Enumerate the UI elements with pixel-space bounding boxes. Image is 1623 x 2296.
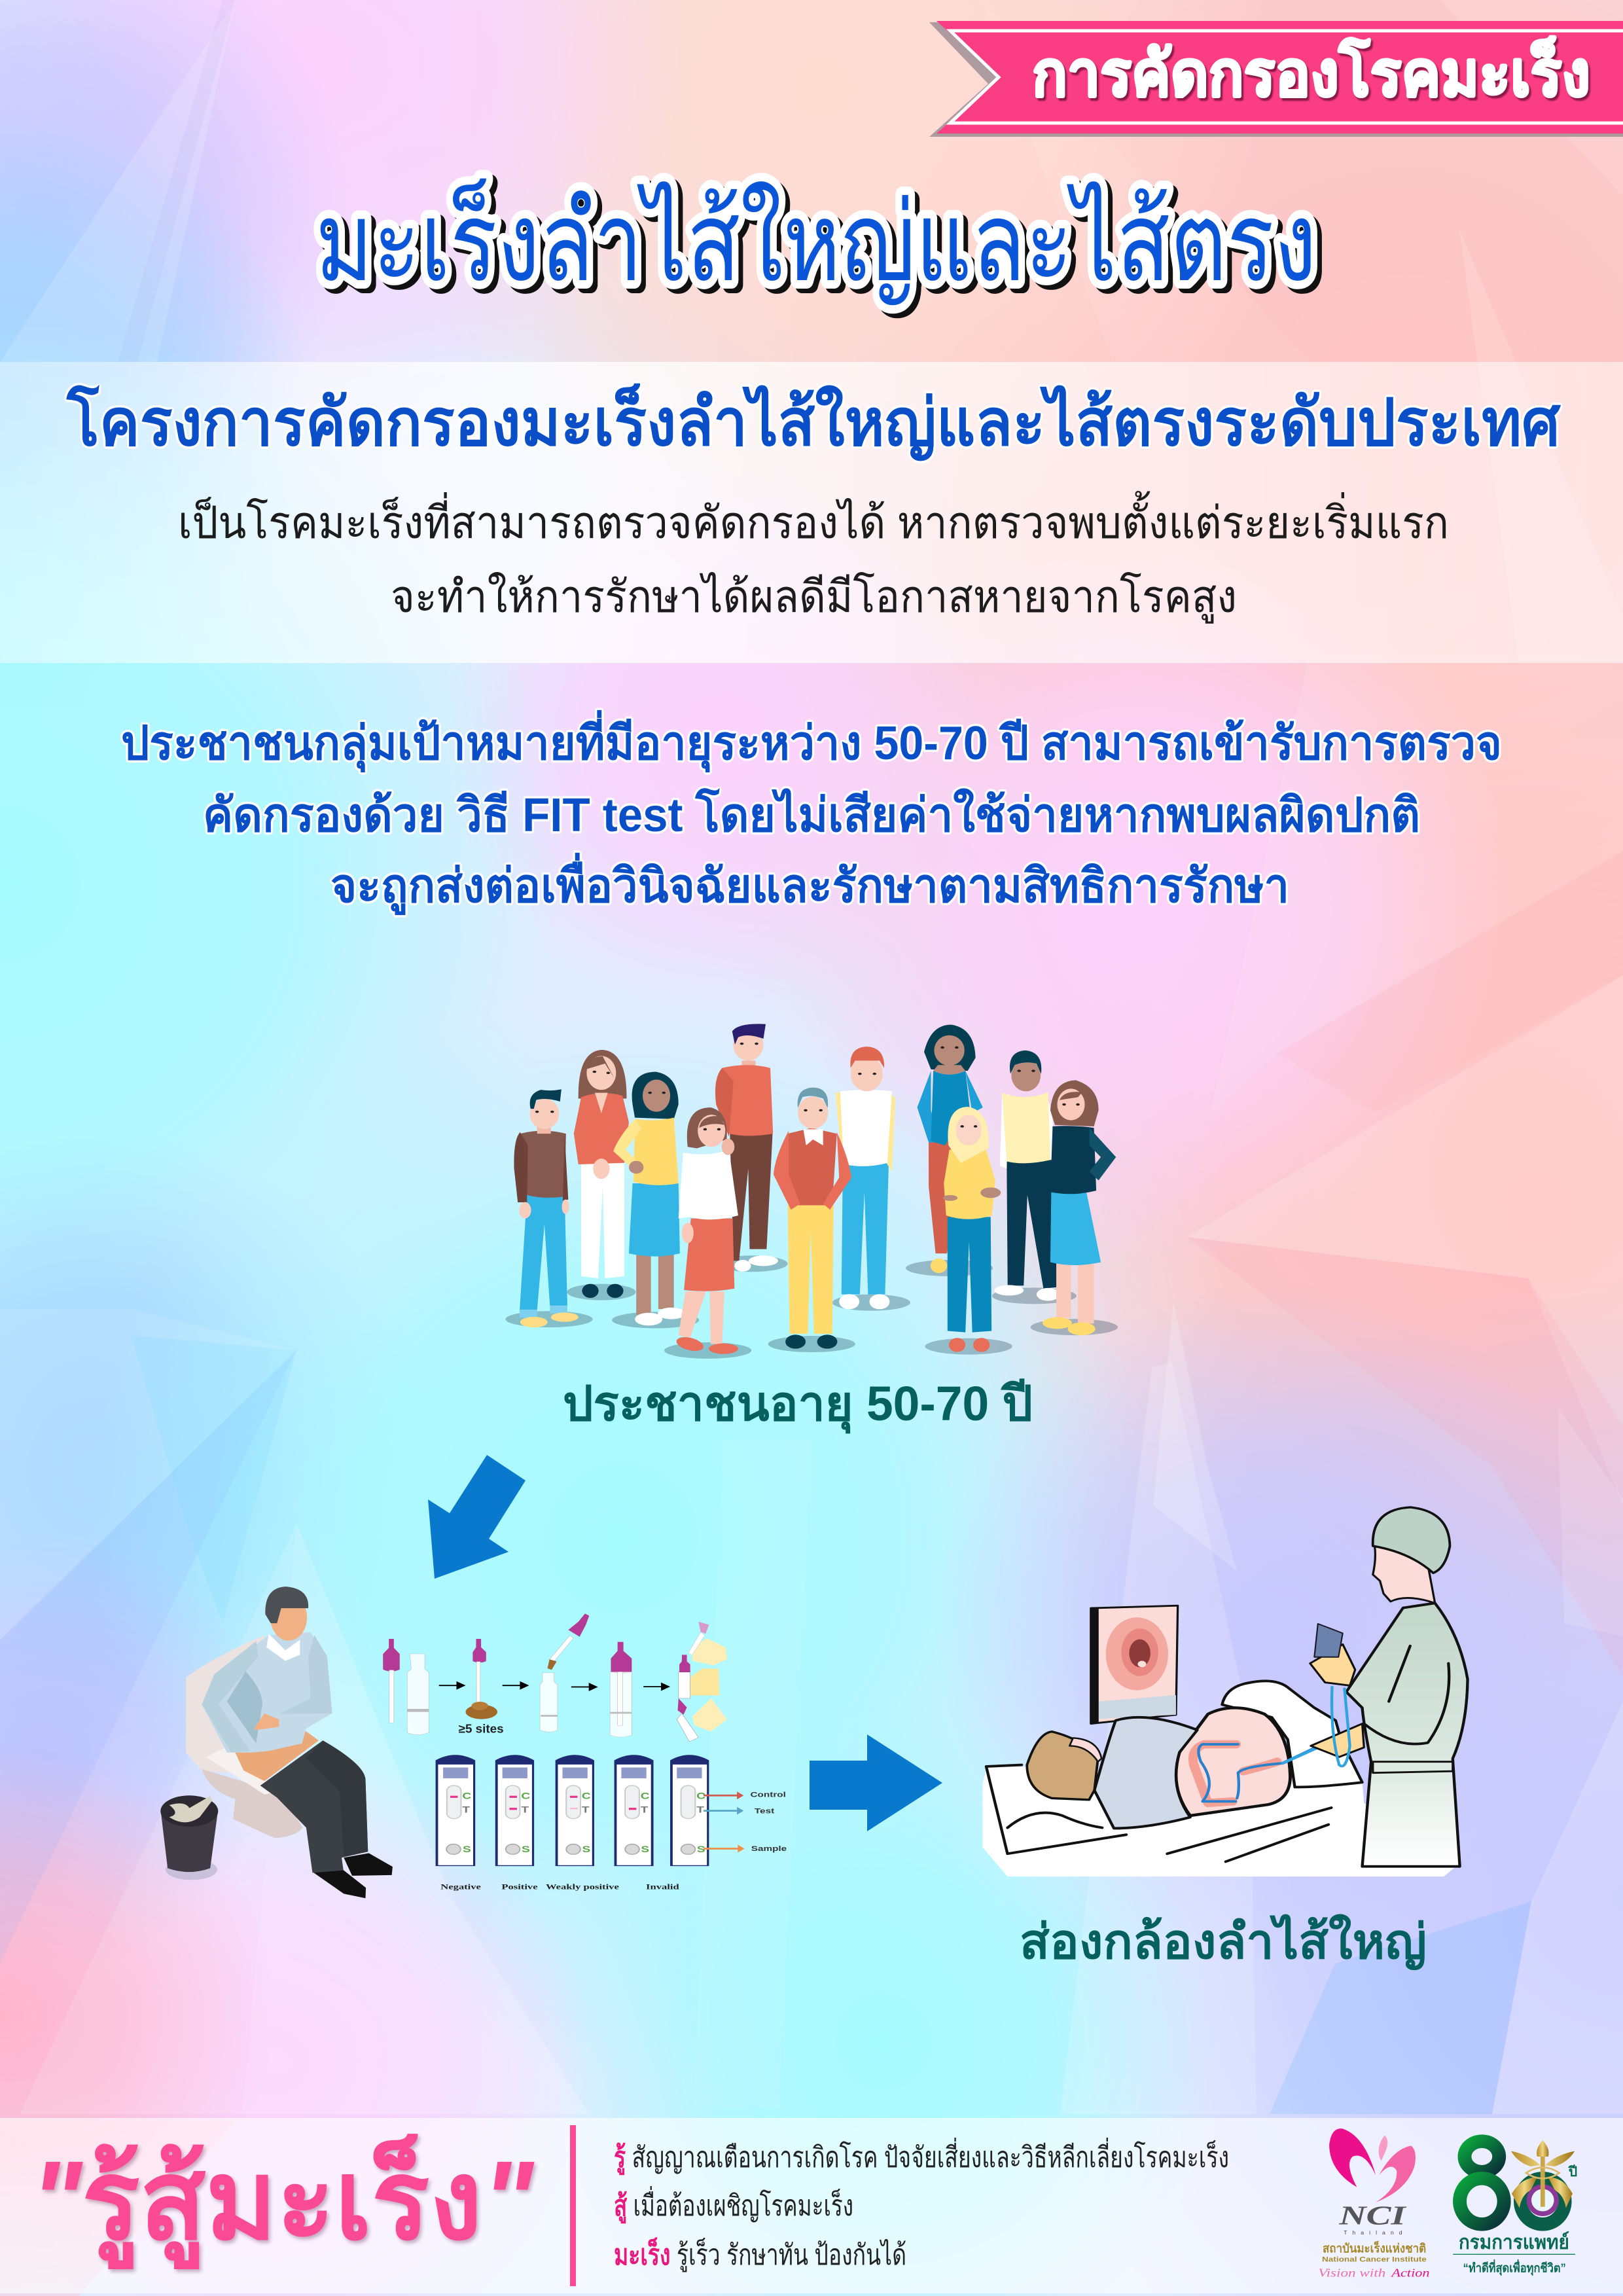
labels: test results: Positive	[501, 1883, 538, 1892]
icons: step arrows	[439, 1681, 670, 1691]
text block: target group description: ประชาชนกลุ่มเป้าหมายที่มีอายุระหว่าง 50-70 ปี สามารถเข้ารับการตรวจ	[121, 709, 1502, 773]
text block: target group description: คัดกรองด้วย วิธี FIT test โดยไม่เสียค่าใช้จ่ายหากพบผลผิดปกติ	[203, 787, 1420, 842]
caption: people aged 50-70: ประชาชนอายุ 50-70 ปี	[563, 1376, 1033, 1434]
monitor	[1090, 1605, 1178, 1724]
legend arrows: control, test, sample: Sample	[751, 1844, 787, 1853]
message 3: มะเร็ง รู้เร็ว รักษาทัน ป้องกันได้	[614, 2237, 906, 2272]
message 1: รู้ สัญญาณเตือนการเกิดโรค ปัจจัยเสี่ยงและวิธีหลีกเลี่ยงโรคมะเร็ง	[614, 2137, 1229, 2175]
doctor	[1310, 1507, 1468, 1867]
patient	[1027, 1681, 1363, 1828]
icon: waste bin	[160, 1795, 218, 1880]
person: woman with long hair and white trousers	[574, 1050, 629, 1298]
icon: capped tube	[610, 1642, 632, 1737]
icons: test cassettes: T	[582, 1804, 590, 1815]
divider	[570, 2125, 576, 2286]
figure: seated man	[202, 1587, 393, 1898]
icons: test cassettes: S	[641, 1844, 649, 1854]
person: left man in brown sweater	[514, 1089, 579, 1327]
labels: test results	[440, 1883, 679, 1892]
person: tall man in orange	[715, 1024, 778, 1272]
icons: test cassettes: S	[697, 1844, 705, 1854]
panel: white introduction band	[0, 362, 1623, 663]
text block: target group description	[121, 709, 1502, 916]
icons: test cassettes: C	[696, 1791, 705, 1801]
person: grey haired man in red vest	[774, 1088, 851, 1349]
colon with endoscope	[1193, 1740, 1332, 1803]
illustration: group of people	[505, 1024, 1118, 1359]
icons: test cassettes: S	[582, 1844, 590, 1854]
arrow: pointing right	[810, 1734, 942, 1831]
intro text line 1: เป็นโรคมะเร็งที่สามารถตรวจคัดกรองได้ หากตรวจพบตั้งแต่ระยะเริ่มแรก	[178, 491, 1449, 548]
icon: diagonal dropper and tube	[540, 1613, 589, 1732]
person: dark haired woman in blue top	[918, 1025, 983, 1273]
logo: Department of Medical Services 80 years: กรมการแพทย์	[1459, 2231, 1569, 2253]
person: red haired man in white	[836, 1047, 895, 1309]
icons: test cassettes: T	[696, 1804, 704, 1815]
logo: Department of Medical Services 80 years: “ทำดีที่สุดเพื่อทุกชีวิต”	[1463, 2259, 1566, 2276]
patient bed	[982, 1765, 1460, 1876]
illustration: colonoscopy procedure	[982, 1507, 1468, 1876]
icons: test cassettes: C	[462, 1791, 471, 1801]
logo: National Cancer Institute: Thailand	[1344, 2229, 1402, 2236]
logo: Department of Medical Services 80 years: ปี	[1568, 2164, 1577, 2179]
icon: dropper on stool sample	[466, 1639, 497, 1719]
illustration: man on toilet	[160, 1587, 393, 1898]
logo: National Cancer Institute: สถาบันมะเร็งแห่งชาติ	[1323, 2240, 1426, 2255]
icons: test cassettes: T	[641, 1804, 648, 1815]
title: มะเร็งลำไส้ใหญ่และไส้ตรง	[315, 178, 1317, 305]
icons: test cassettes: S	[463, 1844, 471, 1854]
legend arrows: control, test, sample: Test	[755, 1806, 775, 1815]
logo: National Cancer Institute: NCI	[1338, 2201, 1407, 2231]
caption: colonoscopy: ส่องกล้องลำไส้ใหญ่	[1020, 1913, 1427, 1970]
intro text line 2: จะทำให้การรักษาได้ผลดีมีโอกาสหายจากโรคสูง	[391, 571, 1237, 624]
legend arrows: control, test, sample	[704, 1791, 787, 1853]
icon: toilet	[186, 1635, 303, 1838]
illustration: FIT test kit procedure	[383, 1613, 787, 1892]
icons: test cassettes: C	[582, 1791, 591, 1801]
icons: test cassettes: S	[522, 1844, 530, 1854]
banner: category ribbon	[929, 21, 1623, 137]
person: woman in white top and red skirt	[673, 1107, 738, 1354]
labels: test results: Negative	[440, 1883, 482, 1892]
legend arrows: control, test, sample: Control	[750, 1791, 786, 1799]
slogan: "รู้สู้มะเร็ง"	[31, 2134, 535, 2269]
panel: bottom campaign strip	[0, 2118, 1623, 2293]
logo: National Cancer Institute	[1318, 2128, 1430, 2280]
banner text: การคัดกรองโรคมะเร็ง	[1032, 36, 1590, 109]
person: dark skinned man in pale yellow	[994, 1050, 1060, 1300]
labels: test results: Weakly positive	[546, 1883, 620, 1892]
person: woman in yellow top and blue skirt	[613, 1071, 685, 1325]
icon: dropper and tube step 1	[383, 1639, 429, 1734]
icons: test cassettes: C	[521, 1791, 530, 1801]
icons: test cassettes: T	[462, 1804, 470, 1815]
text block: target group description: จะถูกส่งต่อเพื่อวินิจฉัยและรักษาตามสิทธิการรักษา	[330, 852, 1289, 916]
logo: National Cancer Institute: National Cancer Institute	[1322, 2255, 1427, 2263]
logo: National Cancer Institute: Action	[1391, 2267, 1430, 2280]
labels: test results: Invalid	[646, 1883, 679, 1892]
person: blonde woman in yellow	[943, 1107, 1001, 1352]
icons: test cassettes: C	[641, 1791, 650, 1801]
message 2: สู้ เมื่อต้องเผชิญโรคมะเร็ง	[614, 2185, 853, 2223]
icon: hands holding test	[677, 1622, 727, 1742]
icons: test cassettes: T	[521, 1804, 529, 1815]
logo: National Cancer Institute: Vision with	[1318, 2267, 1385, 2280]
arrow: diagonal down-left	[428, 1455, 526, 1579]
logo: Department of Medical Services 80 years	[1453, 2140, 1577, 2276]
person: right woman in navy top	[1043, 1080, 1116, 1335]
icons: test cassettes	[436, 1755, 709, 1866]
label: sites: ≥5 sites	[459, 1722, 504, 1736]
